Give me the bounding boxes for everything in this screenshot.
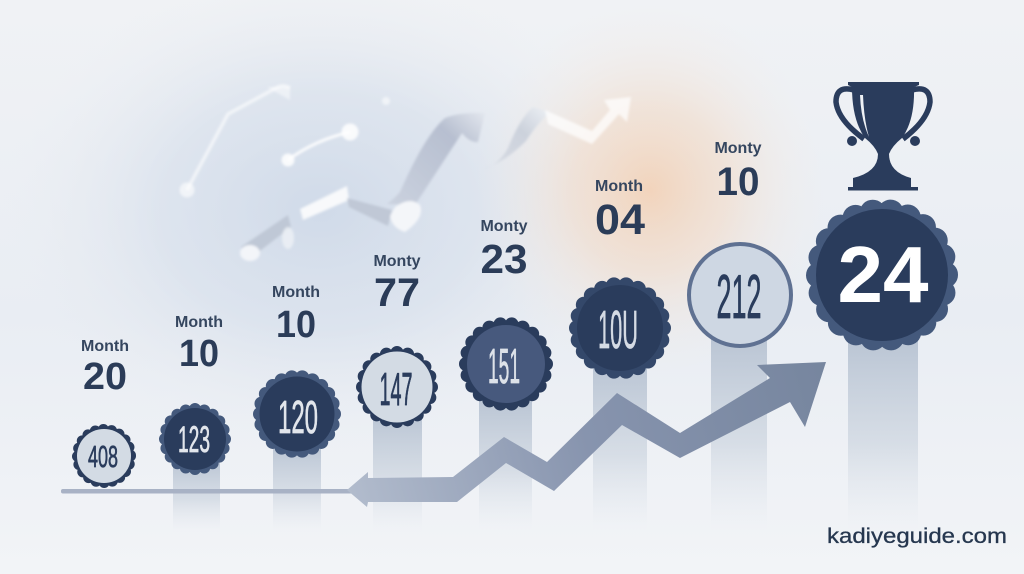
faint background trend lines	[180, 86, 631, 261]
step 2: label: Month	[175, 314, 223, 331]
step 3: badge	[260, 376, 334, 452]
step 7: label: 10	[716, 160, 760, 204]
step 4: badge	[362, 352, 432, 422]
step 6: label: 04	[595, 196, 645, 244]
step 6: label	[595, 178, 645, 244]
columns	[173, 338, 918, 532]
step 6: badge	[577, 285, 663, 371]
final badge: 24	[838, 230, 929, 319]
icon: trophy	[836, 82, 930, 190]
step 5: badge	[466, 324, 546, 404]
step 5: label	[480, 218, 528, 282]
step 4: label	[373, 253, 421, 315]
growth arrow	[347, 362, 826, 507]
step 1: badge	[77, 429, 131, 483]
step 7: badge	[689, 244, 791, 346]
step 7: label	[714, 140, 762, 204]
step 7: label: Monty	[714, 140, 762, 157]
step 1: label: Month	[81, 338, 129, 355]
step 7: badge: 212	[716, 263, 762, 332]
step 5: label: Monty	[480, 218, 528, 235]
step 3: label: Month	[272, 284, 320, 301]
final badge	[816, 209, 948, 341]
step 2: label	[175, 314, 223, 375]
step 3: badge: 120	[278, 391, 318, 443]
step 4: badge: 147	[380, 363, 412, 415]
step 4: label: Monty	[373, 253, 421, 270]
step 3: label: 10	[276, 304, 316, 346]
step 2: badge: 123	[178, 419, 210, 460]
step 5: label: 23	[480, 236, 528, 282]
website credit: kadiyeguide.com	[827, 525, 1007, 548]
step 6: badge: 10U	[598, 300, 638, 360]
step 6: label: Month	[595, 178, 643, 195]
step 5: badge: 151	[488, 340, 520, 394]
step 2: label: 10	[179, 333, 219, 375]
step 3: label	[272, 284, 320, 346]
step 4: label: 77	[374, 271, 420, 315]
baseline	[61, 489, 361, 494]
step 1: label	[81, 338, 129, 398]
step 1: label: 20	[83, 356, 127, 398]
step 2: badge	[164, 408, 226, 470]
step 1: badge: 408	[88, 439, 118, 474]
